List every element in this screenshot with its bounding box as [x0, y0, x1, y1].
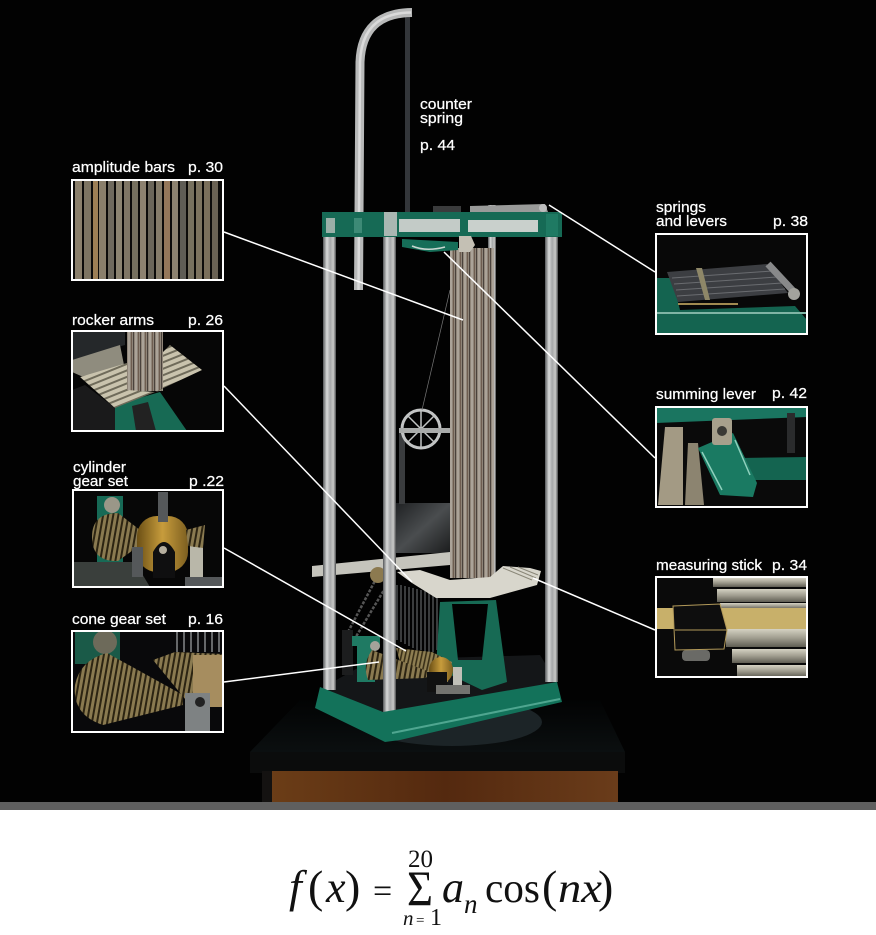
measuring plate: [395, 503, 451, 553]
page: p. 42: [772, 385, 807, 402]
formula: ): [598, 861, 613, 912]
photo: [73, 332, 202, 430]
gray divider band: [0, 802, 876, 810]
inset: summing lever: [656, 385, 807, 507]
base plate: [315, 682, 562, 742]
heading: amplitude bars: [72, 159, 175, 176]
rocker arms fan: [397, 566, 541, 598]
green bearing post: [352, 636, 380, 682]
pulley arm: [399, 432, 405, 504]
amplitude bars column: [450, 248, 494, 578]
frame: [72, 180, 223, 280]
heading: cone gear set: [72, 611, 167, 628]
inset: springs and levers: [656, 199, 808, 334]
lever bracket: [459, 236, 475, 252]
inset: cone gear set: [72, 611, 223, 732]
formula: (: [308, 861, 323, 912]
page: p. 34: [772, 557, 807, 574]
frame: [72, 331, 223, 431]
heading: springs: [656, 199, 706, 216]
formula: 1: [430, 905, 442, 931]
bent rod: [358, 12, 412, 290]
heading line 2: and levers: [656, 213, 727, 230]
formula: =: [416, 913, 424, 929]
photo: [73, 181, 222, 279]
heading: cylinder: [73, 459, 126, 476]
label: counter spring: counter: [420, 96, 472, 113]
base highlight: [392, 699, 560, 733]
formula: 20: [408, 846, 433, 873]
photo: [74, 492, 222, 586]
black plate: [342, 630, 353, 675]
label: counter spring: [420, 96, 472, 154]
formula: (: [542, 861, 557, 912]
formula: nx: [558, 866, 602, 912]
formula: x: [325, 863, 346, 912]
cone gear 1: [366, 650, 430, 680]
pulley wire: [422, 290, 450, 410]
bearing ball: [370, 641, 380, 651]
inset: amplitude bars: [72, 159, 223, 280]
callout lines: [224, 205, 655, 682]
photo: [657, 408, 806, 505]
heading: rocker arms: [72, 312, 154, 329]
top frame: [322, 212, 562, 237]
label: counter spring: spring: [420, 110, 463, 127]
gray clamp: [327, 564, 336, 576]
formula: =: [373, 873, 392, 910]
chain gear: [370, 567, 386, 583]
pulley bracket: [399, 428, 451, 433]
formula: n: [464, 889, 478, 919]
page: p. 16: [188, 611, 223, 628]
formula: Σ: [407, 860, 433, 916]
end roller: [539, 204, 547, 212]
fan stripes: [503, 567, 538, 580]
photo: harmonic analyzer machine: [312, 12, 562, 746]
cross bar: [312, 552, 450, 577]
formula: n: [403, 906, 414, 930]
silver bracket: [453, 667, 462, 693]
formula: f: [289, 861, 308, 912]
back rod: [488, 205, 496, 580]
white footer: [0, 810, 876, 935]
black bracket: [427, 672, 447, 692]
pulley wheel: [402, 410, 440, 448]
silver foot: [436, 685, 470, 694]
frame: [656, 234, 807, 334]
inset: cylinder gear set: [73, 459, 224, 587]
formula: ): [345, 861, 360, 912]
top springs comb: [433, 206, 461, 213]
inset: measuring stick: [656, 557, 807, 677]
formula: a: [442, 863, 464, 912]
drive chain: [348, 575, 384, 640]
counter spring: [405, 16, 410, 214]
rods: [323, 234, 558, 712]
base floor: [322, 655, 558, 714]
label: counter spring: p. 44: [420, 137, 455, 154]
heading: measuring stick: [656, 557, 763, 574]
inset: rocker arms: [72, 312, 223, 431]
lever highlight: [412, 246, 445, 249]
brass cylinder end: [429, 657, 453, 683]
heading line 2: gear set: [73, 473, 129, 490]
page: p. 30: [188, 159, 223, 176]
rod highlight: [358, 12, 411, 290]
heading: summing lever: [656, 386, 756, 403]
photo: [657, 578, 806, 676]
frame: [73, 490, 223, 587]
formula: [289, 846, 613, 931]
turntable disc: [362, 698, 542, 746]
page: p .22: [189, 473, 224, 490]
photo: [73, 632, 222, 731]
page: p. 26: [188, 312, 223, 329]
frame: [656, 407, 807, 507]
page: p. 38: [773, 213, 808, 230]
frame: [72, 631, 223, 732]
photo: [657, 262, 806, 333]
green stand: [436, 600, 507, 690]
formula: cos: [485, 866, 540, 912]
photo: table: [250, 700, 625, 802]
top spring plate: [470, 204, 548, 213]
hanging rods: [397, 585, 437, 652]
cone gear 2: [396, 648, 452, 682]
frame: [656, 577, 807, 677]
summing lever: [402, 239, 458, 252]
